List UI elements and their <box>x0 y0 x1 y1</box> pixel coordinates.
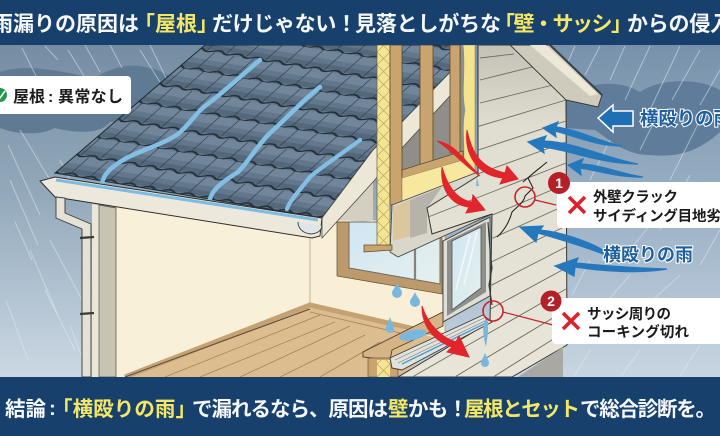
conclusion banner: 結論 <box>5 398 46 421</box>
callout 2: sash caulking <box>483 290 720 344</box>
callout 1: wall crack: 外壁クラック <box>593 189 678 206</box>
siding wall <box>398 45 568 377</box>
red arrows: water intrusion <box>422 130 518 357</box>
conclusion banner <box>0 377 720 436</box>
badge 1 <box>548 172 570 194</box>
gable roof <box>510 45 602 107</box>
foundation <box>518 347 563 377</box>
inner cavity <box>402 45 464 175</box>
gap in caulking <box>488 222 492 305</box>
conclusion banner: 「横殴りの雨」 <box>52 398 196 421</box>
water streams on roof <box>102 60 360 209</box>
storm cloud right <box>560 81 720 156</box>
crack in siding <box>497 162 547 237</box>
conclusion banner: 壁 <box>388 398 408 421</box>
icon: red cross 1 <box>569 197 585 213</box>
back window <box>337 222 442 294</box>
insulation below plate <box>402 160 475 205</box>
left insulation column <box>377 45 390 248</box>
conclusion banner: かも！ <box>408 398 468 421</box>
blue wind-driven rain arrows <box>520 122 667 276</box>
conclusion banner: で総合診断を。 <box>580 398 716 421</box>
status badge: roof OK <box>0 76 131 114</box>
conclusion banner: で漏れるなら、原因は <box>192 398 388 421</box>
title banner <box>0 0 720 45</box>
title banner: 「屋根」 <box>134 13 218 36</box>
eaves gutter <box>40 177 322 238</box>
window sill <box>390 315 492 370</box>
status badge: roof OK: : <box>48 89 53 106</box>
timber studs <box>390 45 463 205</box>
storm cloud left <box>0 66 200 133</box>
outer wall edge <box>92 204 116 377</box>
lower stud ledge <box>364 245 392 252</box>
title banner: 「壁・サッシ」 <box>494 13 632 36</box>
title banner: だけじゃない！ <box>212 13 357 36</box>
sash window <box>443 217 490 322</box>
callout 2: sash caulking: コーキング切れ <box>587 323 690 341</box>
tiled roof <box>55 45 460 218</box>
icon: green check <box>0 88 7 102</box>
callout 1: wall crack <box>515 172 720 228</box>
label: wind rain middle: 横殴りの雨 <box>603 245 693 265</box>
badge 1: 1 <box>555 175 563 191</box>
big arrow: wind direction <box>598 105 633 132</box>
callout 2: sash caulking: サッシ周りの <box>587 306 671 323</box>
downpipe <box>56 197 94 377</box>
badge 2: 2 <box>547 293 555 309</box>
conclusion banner: 屋根とセット <box>464 398 580 421</box>
sky background <box>0 45 720 377</box>
soffit under eave <box>322 182 373 238</box>
conclusion banner: : <box>49 397 56 420</box>
rain streaks <box>6 45 720 376</box>
icon: red cross 2 <box>563 313 579 329</box>
right insulation <box>463 45 475 170</box>
roof verge band <box>322 62 460 238</box>
water drops <box>386 177 489 367</box>
status badge: roof OK: 異常なし <box>58 88 123 106</box>
floor box wall section <box>390 172 492 257</box>
floor ledge <box>363 312 443 377</box>
wooden floor <box>125 305 445 377</box>
interior back wall <box>310 220 445 345</box>
title banner: 見落としがちな <box>355 12 501 36</box>
badge 2 <box>540 290 562 312</box>
interior left wall <box>116 200 340 377</box>
status badge: roof OK: 屋根 <box>13 88 45 106</box>
